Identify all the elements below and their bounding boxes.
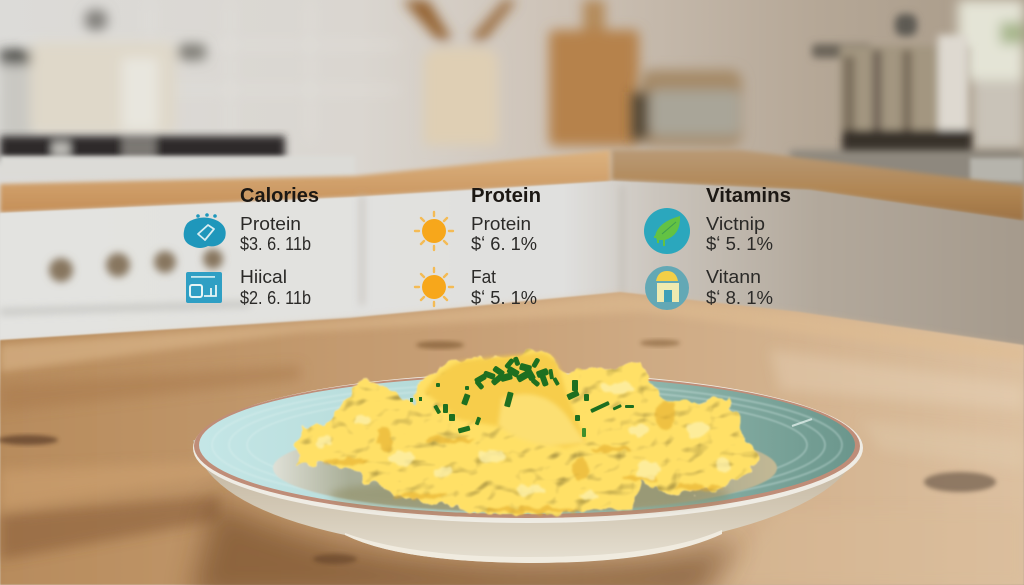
label: Vitann: Vitann (706, 267, 761, 287)
counter (0, 150, 1024, 221)
label: Protein: Protein (240, 214, 301, 234)
plate rim (193, 373, 863, 523)
icon: teal cloud with tag (184, 213, 226, 248)
heading: Calories: Calories (240, 185, 319, 207)
value: $ 6.1%: $ʻ 6. 1% (471, 234, 537, 254)
icon: sun (415, 212, 453, 250)
value: $ 5.1%: $ʻ 5. 1% (471, 288, 537, 308)
white pot on stove (0, 10, 206, 140)
plate bowl (199, 376, 855, 514)
plate underside (193, 440, 862, 563)
back bowl (632, 70, 742, 146)
plate (193, 373, 863, 563)
wood bands (0, 350, 1024, 585)
cabinets (0, 181, 1024, 350)
vase with wooden spoons (402, 0, 516, 145)
icon: leaf in teal circle (644, 208, 690, 254)
column: protein (415, 185, 541, 308)
cutting board (549, 0, 639, 146)
steel pot (812, 14, 972, 158)
column: calories (184, 185, 319, 308)
egg shading (323, 401, 724, 513)
heading: Protein: Protein (471, 185, 541, 207)
label: Protein: Protein (471, 214, 531, 234)
central mound (424, 353, 586, 448)
value: $2. 6. 11b: $2. 6. 11b (240, 288, 311, 308)
icon: dome in teal circle (645, 266, 689, 310)
value: $ 8.1%: $ʻ 8. 1% (706, 288, 773, 308)
stove (0, 136, 285, 160)
label: Fat: Fat (471, 267, 496, 287)
value: $3. 6. 11b: $3. 6. 11b (240, 234, 311, 254)
icon: teal square panel (186, 272, 222, 303)
column: vitamins (644, 185, 791, 310)
plate centre (273, 424, 777, 512)
label: Victnip: Victnip (706, 214, 765, 234)
egg highlights (315, 382, 731, 499)
plate cast shadow (190, 500, 740, 585)
chives (410, 356, 634, 437)
label: Hiical: Hiical (240, 267, 287, 287)
icon: sun (415, 268, 453, 306)
window (958, 0, 1024, 150)
heading: Vitamins: Vitamins (706, 185, 791, 207)
value: $ 5.1%: $ʻ 5. 1% (706, 234, 773, 254)
wooden table (0, 292, 1024, 585)
cabinet knobs (49, 249, 223, 282)
scrambled eggs (296, 350, 758, 514)
